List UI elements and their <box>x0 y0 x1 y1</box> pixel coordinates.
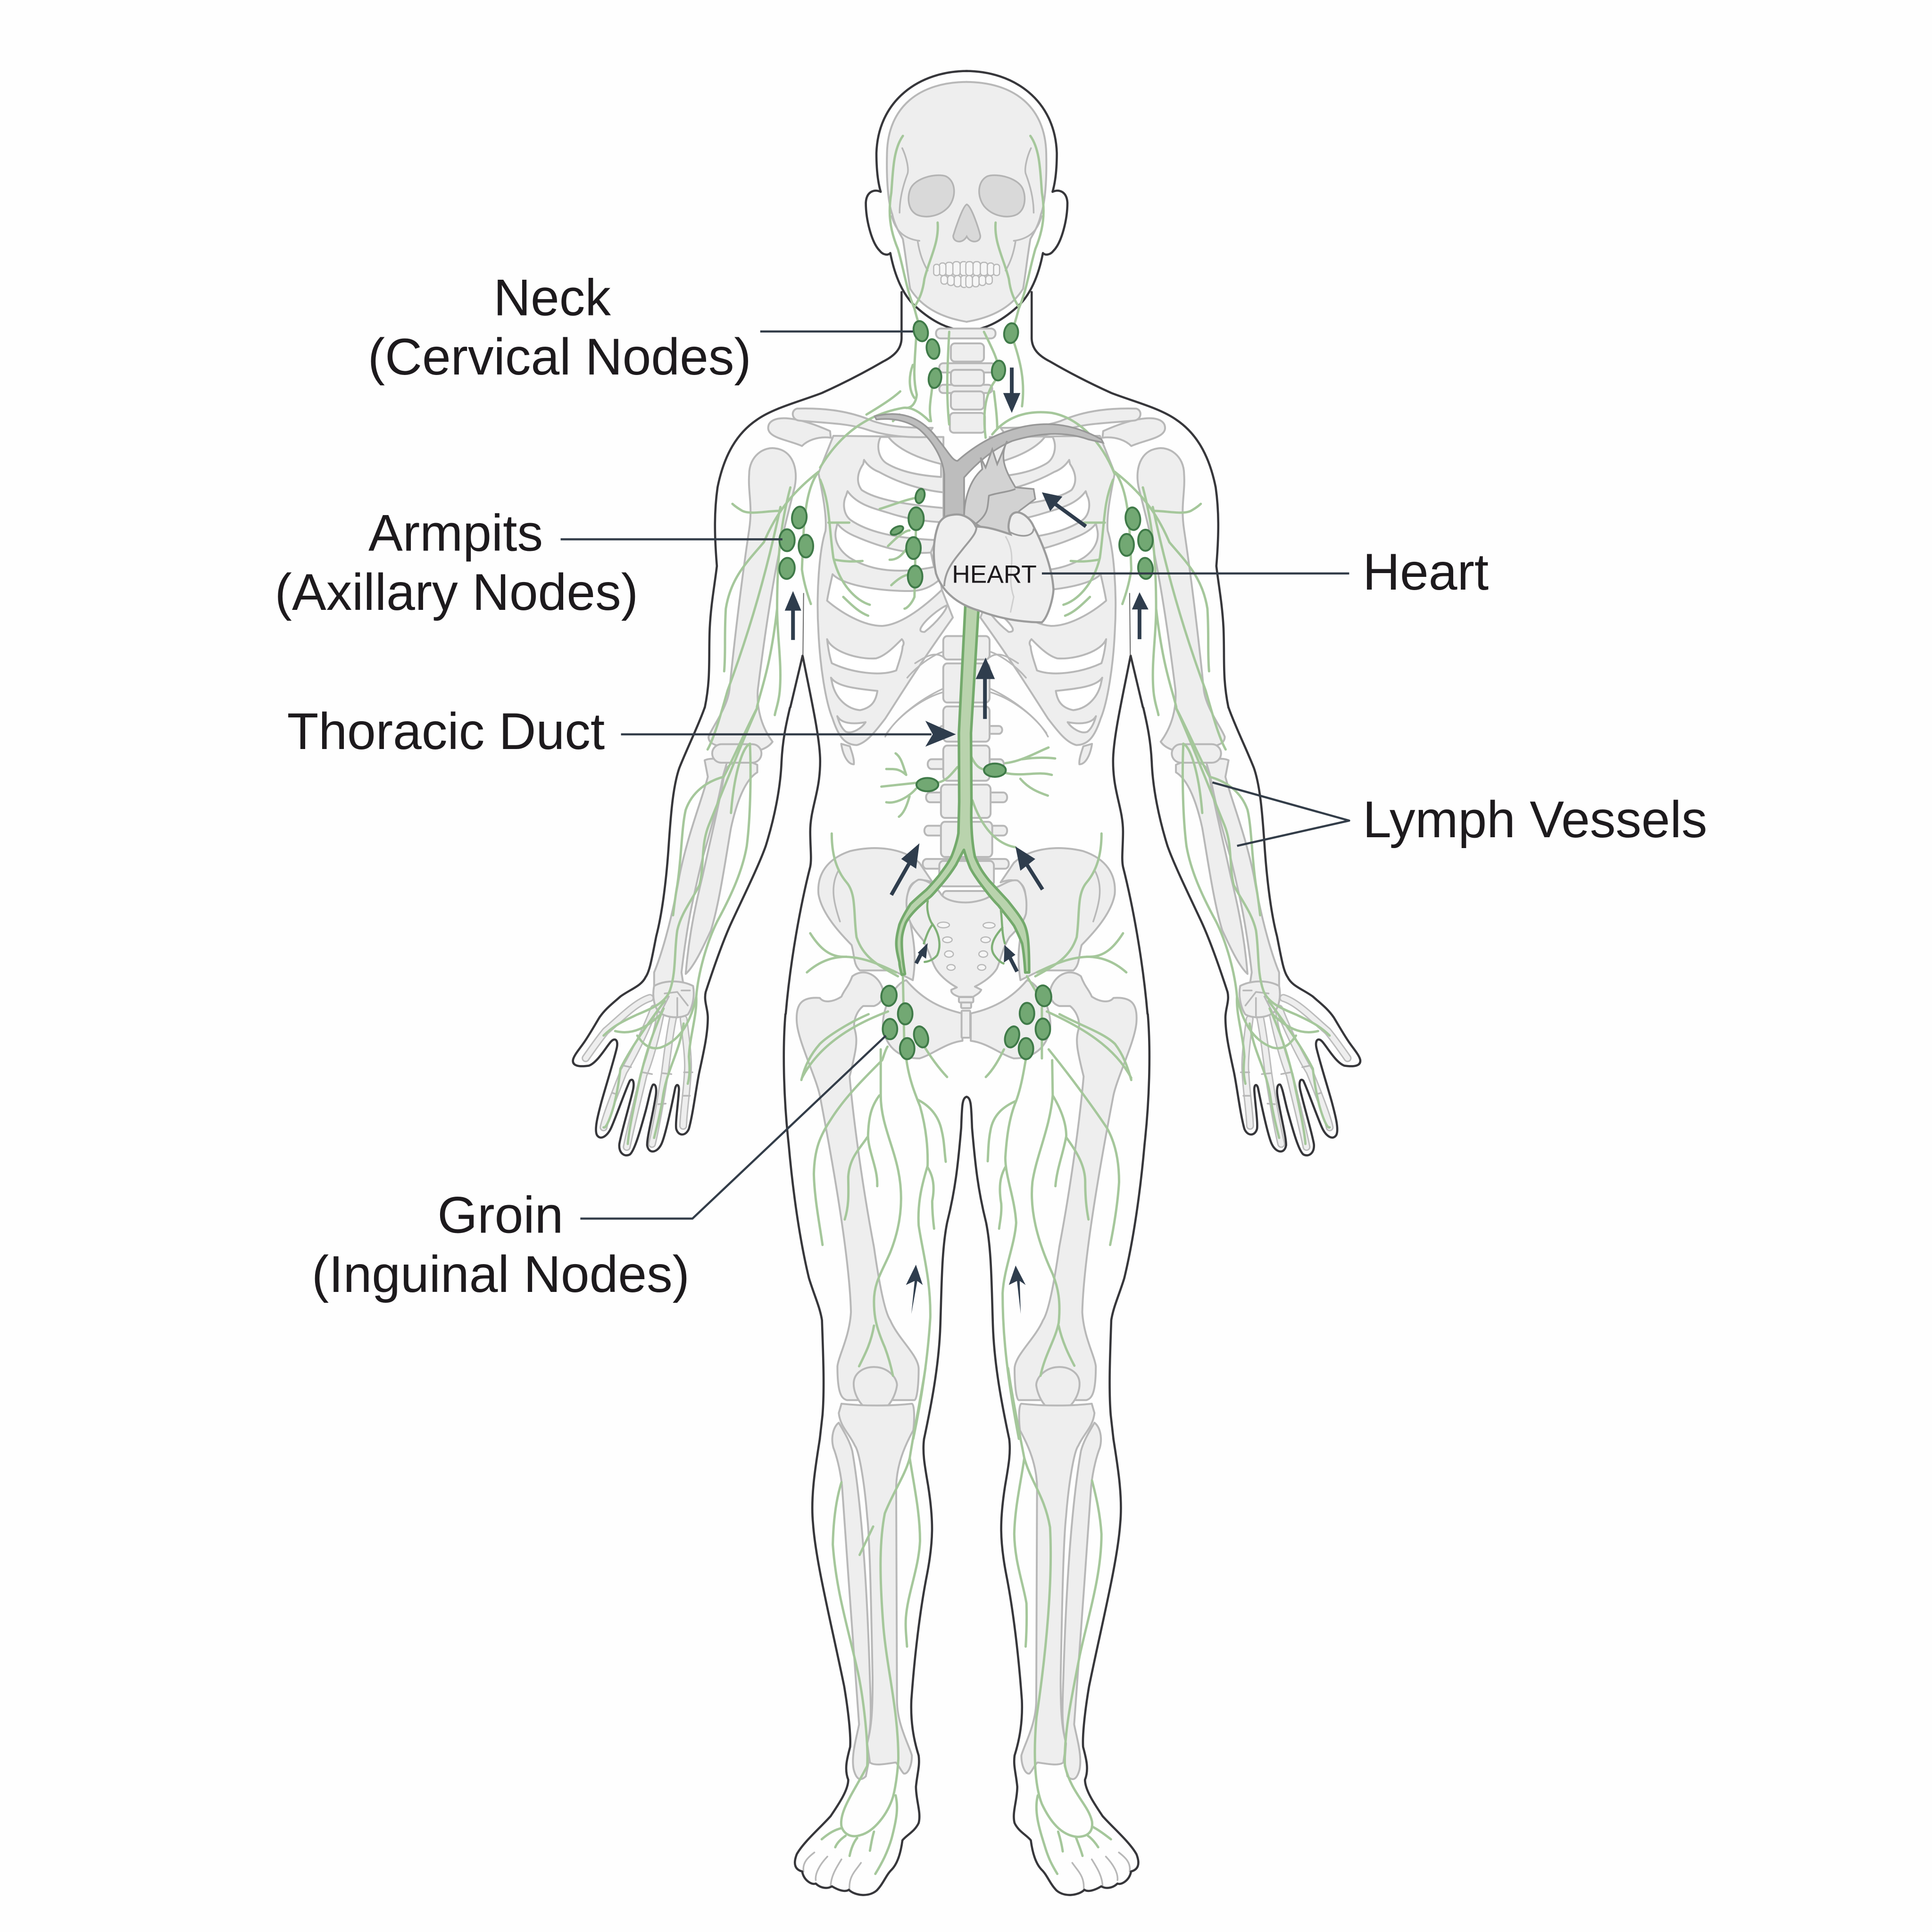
label: neck <box>368 269 913 386</box>
label: armpits: Armpits <box>368 505 543 562</box>
spine: thoracic and lumbar vertebrae <box>923 636 1009 905</box>
flow arrows: neck and heart <box>1003 367 1086 526</box>
lymph nodes: armpits, chest, abdomen, groin <box>778 487 1154 1059</box>
flow arrows: thighs <box>906 1265 1025 1314</box>
label: thoracic duct: Thoracic Duct <box>287 703 605 760</box>
label: groin: (Inguinal Nodes) <box>312 1246 690 1303</box>
spine: cervical vertebrae <box>936 328 996 433</box>
heart <box>934 512 1053 622</box>
label: armpits: (Axillary Nodes) <box>275 564 638 621</box>
lymph vessels: neck and head junctions <box>820 332 1115 474</box>
lymph vessels: lower legs and feet <box>822 1368 1111 1874</box>
lymph nodes: neck <box>911 319 1019 389</box>
thoracic duct <box>896 606 1029 975</box>
lymph vessels: abdomen, pelvis and chest chain <box>802 497 1131 1078</box>
right half of body: skeleton, outline, limb vessels <box>966 71 1360 1895</box>
pelvis centre: sacrum and coccyx <box>907 880 1026 1038</box>
lymph vessels: thighs <box>801 1014 1131 1439</box>
skull nose opening <box>953 204 980 242</box>
label: heart: Heart <box>1363 543 1489 601</box>
great vessels above the heart <box>875 414 1103 544</box>
label: thoracic duct <box>287 703 956 760</box>
label inside heart: HEART <box>952 561 1037 589</box>
label: neck: (Cervical Nodes) <box>368 328 751 386</box>
label: groin: Groin <box>437 1187 563 1244</box>
left half of body: skeleton, outline, limb vessels <box>573 71 967 1895</box>
label: neck: Neck <box>493 269 611 327</box>
flow arrows: axillae, duct and pelvis <box>785 591 1149 972</box>
label: lymph vessels <box>1212 783 1707 849</box>
label: armpits <box>275 505 783 621</box>
label: groin <box>312 1036 886 1303</box>
label: lymph vessels: Lymph Vessels <box>1363 791 1707 849</box>
